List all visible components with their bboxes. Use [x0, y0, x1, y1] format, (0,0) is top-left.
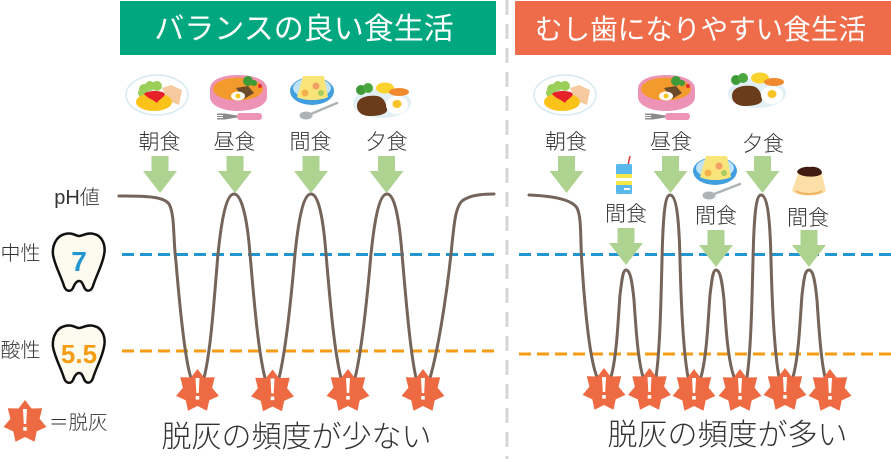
- icon: juice box: [616, 156, 632, 194]
- meal labels right: 間食: [695, 205, 737, 228]
- meal labels right: 朝食: [545, 131, 587, 154]
- meal labels right: 夕食: [742, 133, 784, 156]
- meal labels right: [545, 131, 829, 230]
- icon: dinner plate left: [353, 82, 411, 118]
- demineralization markers left: [176, 369, 444, 411]
- acid label: 酸性: [0, 339, 40, 362]
- meal labels right: 間食: [605, 203, 647, 226]
- icon: snack bowl right: [693, 156, 740, 200]
- icon: lunch box left: [210, 75, 267, 120]
- meal labels right: 間食: [787, 207, 829, 230]
- caption right: 脱灰の頻度が多い: [608, 419, 848, 452]
- neutral pH line left: [122, 253, 496, 256]
- pH curve right: [529, 195, 825, 377]
- meal labels left: 夕食: [366, 131, 408, 154]
- panel: balanced diet banner: [120, 1, 496, 55]
- meal labels left: 昼食: [214, 131, 256, 154]
- icon: pudding: [792, 167, 826, 196]
- legend: demineralization: ＝脱灰: [49, 412, 108, 434]
- meal labels right: 昼食: [650, 131, 692, 154]
- demineralization markers right: [583, 368, 851, 411]
- panel: balanced diet banner: バランスの良い食生活: [154, 13, 454, 46]
- legend: demineralization: [4, 400, 108, 442]
- pH curve left: [119, 194, 494, 378]
- icon: tooth pH 5.5: 5.5: [61, 339, 97, 369]
- icon: breakfast plate right: [534, 75, 596, 115]
- meal labels left: 朝食: [138, 131, 180, 154]
- icon: snack bowl left: [290, 76, 337, 120]
- y-axis label pH: pH値: [54, 186, 100, 209]
- meal labels left: 間食: [290, 131, 332, 154]
- neutral label: 中性: [0, 242, 40, 265]
- caption left: 脱灰の頻度が少ない: [162, 421, 432, 454]
- icon: tooth pH 7: 7: [71, 246, 87, 277]
- acid pH line right: [519, 352, 891, 356]
- arrows left: [143, 156, 404, 193]
- icon: breakfast plate left: [126, 75, 188, 115]
- icon: tooth pH 5.5: [53, 325, 105, 383]
- icon: tooth pH 7: [53, 233, 105, 291]
- arrows right: [550, 156, 826, 267]
- icon: lunch box right: [638, 75, 695, 120]
- panel: cavity-prone diet banner: [515, 1, 891, 55]
- acid pH line left: [122, 350, 496, 352]
- neutral pH line right: [519, 253, 891, 256]
- meal labels left: [138, 131, 408, 154]
- panel: cavity-prone diet banner: むし歯になりやすい食生活: [535, 14, 866, 45]
- icon: dinner plate right: [728, 72, 786, 108]
